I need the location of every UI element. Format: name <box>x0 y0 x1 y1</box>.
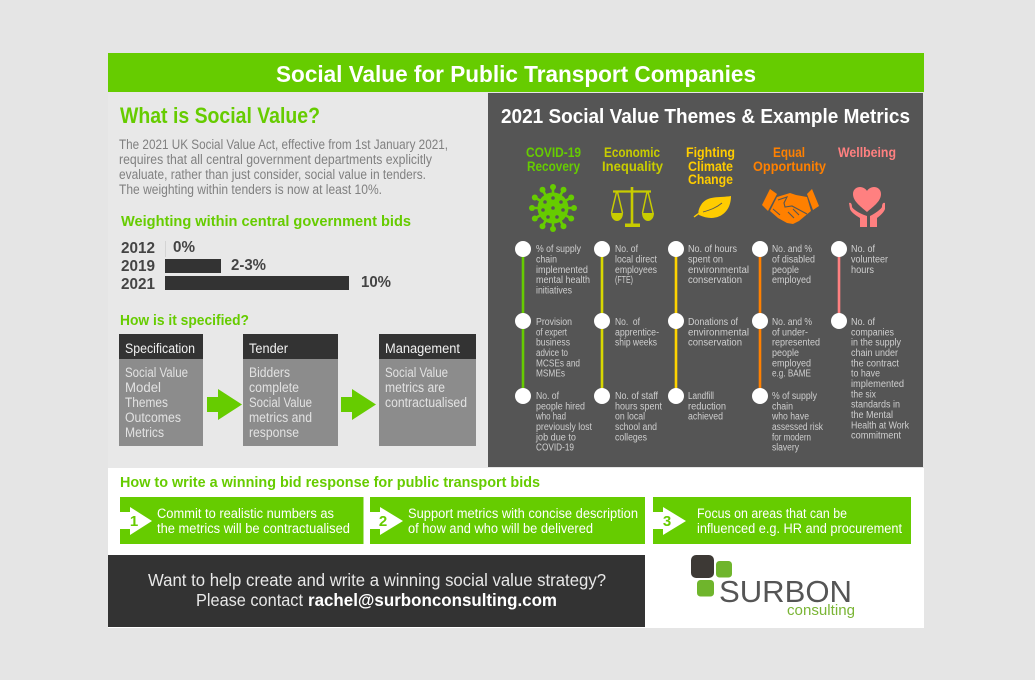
timeline: economic inequality <box>594 241 610 404</box>
metric: economic inequality 3 <box>615 391 662 443</box>
bar 2021: 10% <box>361 274 391 291</box>
theme label: equal opportunity <box>753 145 826 174</box>
icon: handshake <box>762 189 819 224</box>
card: tender: Tender <box>249 341 288 356</box>
metric: equal opportunity 3: who have <box>771 412 809 423</box>
title banner: Social Value for Public Transport Companies <box>276 61 756 87</box>
column: equal opportunity <box>752 145 826 454</box>
metric: equal opportunity 2: of under- <box>772 327 808 338</box>
logo: surbon consulting: consulting <box>787 602 855 619</box>
theme label: equal opportunity: Equal <box>773 145 805 160</box>
step 3 <box>653 497 911 544</box>
step 3: 3 <box>663 513 671 530</box>
metric: economic inequality 1 <box>615 244 657 286</box>
metric: equal opportunity 1 <box>772 244 815 286</box>
metric: equal opportunity 2: represented <box>772 338 820 349</box>
metric: covid-19 recovery 3 <box>535 391 592 454</box>
metric: fighting climate change 1: conservation <box>688 275 742 286</box>
metric: economic inequality 2 <box>615 317 659 349</box>
metric: fighting climate change 1: spent on <box>688 254 723 266</box>
heading: winning bid response: How to write a winning bid response for public transport bids <box>120 475 540 491</box>
metric: covid-19 recovery 3: No. of <box>536 391 559 402</box>
call to action banner <box>108 555 645 627</box>
metric: fighting climate change 1: No. of hours <box>688 244 737 255</box>
card: tender: response <box>249 425 299 440</box>
icon: balance scales <box>611 187 654 227</box>
arrow: tender to management <box>341 389 376 420</box>
column: covid-19 recovery <box>515 145 592 454</box>
card: specification: Social Value <box>125 365 188 380</box>
metric: wellbeing 2: in the supply <box>851 338 901 349</box>
theme label: covid-19 recovery <box>526 145 581 174</box>
metric: equal opportunity 2: employed <box>772 358 811 369</box>
theme label: fighting climate change: Change <box>688 172 733 187</box>
metric: equal opportunity 3: % of supply <box>772 391 817 402</box>
metric: equal opportunity 1: employed <box>772 275 811 286</box>
timeline: wellbeing <box>831 241 847 329</box>
metric: covid-19 recovery 1: initiatives <box>536 285 572 296</box>
metric: covid-19 recovery 3: previously lost <box>536 422 592 433</box>
column: wellbeing <box>831 145 910 442</box>
metric: equal opportunity 2 <box>772 317 820 380</box>
metric: wellbeing 2: chain under <box>851 348 899 359</box>
bar 2012: 2012 <box>121 240 155 257</box>
step 2: Support metrics with concise description <box>408 506 638 521</box>
metric: equal opportunity 3: chain <box>772 401 793 412</box>
logo: surbon consulting: SURBON <box>719 574 852 609</box>
card: specification: Model <box>125 380 161 395</box>
metric: covid-19 recovery 1: chain <box>536 254 557 266</box>
timeline: equal opportunity <box>752 241 768 404</box>
step 3: influenced e.g. HR and procurement <box>697 521 902 536</box>
metric: fighting climate change 3: Landfill <box>688 391 714 402</box>
metric: covid-19 recovery 1: % of supply <box>536 244 581 255</box>
theme label: wellbeing: Wellbeing <box>838 145 896 160</box>
logo: surbon consulting <box>691 555 855 619</box>
call to action banner: rachel@surbonconsulting.com <box>308 590 557 610</box>
step 1 <box>120 497 364 544</box>
metric: fighting climate change 1: environmental <box>688 265 749 276</box>
text block: act description: The 2021 UK Social Value Act, effective from 1st January 2021, <box>119 137 448 152</box>
bar 2019: 2019 <box>121 258 155 275</box>
metric: wellbeing 2: implemented <box>851 379 904 390</box>
metric: economic inequality 3: school and <box>615 422 657 433</box>
metric: wellbeing 1: No. of <box>851 244 875 255</box>
metric: wellbeing 2: the Mental <box>851 410 893 421</box>
metric: wellbeing 2: to have <box>851 369 880 380</box>
theme label: fighting climate change <box>686 145 735 187</box>
bar 2021 <box>121 274 391 293</box>
metric: economic inequality 2: ship weeks <box>615 338 657 349</box>
step 1: 1 <box>130 513 138 530</box>
chart heading: Weighting within central government bids <box>121 214 411 230</box>
metric: economic inequality 1: No. of <box>615 244 638 255</box>
card: management: Social Value <box>385 365 448 380</box>
step 1: Commit to realistic numbers as <box>157 506 334 521</box>
metric: covid-19 recovery 2: advice to <box>536 348 568 359</box>
call to action banner: Want to help create and write a winning social value strategy? <box>148 570 606 590</box>
metric: fighting climate change 3: achieved <box>688 412 723 423</box>
card: tender <box>243 334 338 446</box>
bar 2019 <box>121 257 266 275</box>
theme label: economic inequality <box>602 145 663 174</box>
theme label: economic inequality: Inequality <box>602 159 663 174</box>
theme label: covid-19 recovery: COVID-19 <box>526 145 581 160</box>
panel: 2021 social value themes and example metrics <box>488 93 923 467</box>
metric: economic inequality 1: employees <box>615 265 657 276</box>
section: how is it specified <box>119 313 476 446</box>
metric: covid-19 recovery 2: business <box>536 338 570 349</box>
metric: fighting climate change 2: conservation <box>688 338 742 349</box>
metric: covid-19 recovery 3: who had <box>535 412 566 423</box>
text block: act description <box>119 137 448 197</box>
metric: economic inequality 3: No. of staff <box>615 391 658 402</box>
heading: how is it specified: How is it specified? <box>120 313 249 329</box>
metric: wellbeing 2: No. of <box>851 317 875 328</box>
card: management: contractualised <box>385 395 467 410</box>
step 3: Focus on areas that can be <box>697 506 847 521</box>
metric: covid-19 recovery 2 <box>536 317 580 380</box>
card: tender: metrics and <box>249 410 312 425</box>
card: specification <box>119 334 203 446</box>
metric: covid-19 recovery 1 <box>536 244 590 296</box>
text block: act description: requires that all central government departments explicitly <box>119 152 432 167</box>
metric: wellbeing 2: commitment <box>851 431 901 442</box>
metric: covid-19 recovery 3: people hired <box>536 401 585 412</box>
timeline: fighting climate change <box>668 241 684 404</box>
theme label: fighting climate change: Climate <box>688 159 733 174</box>
metric: economic inequality 1: local direct <box>615 254 657 266</box>
metric: fighting climate change 2: environmental <box>688 327 749 338</box>
step 2: of how and who will be delivered <box>408 521 593 536</box>
icon: heart in hands <box>849 187 885 227</box>
bar 2012: 0% <box>173 239 195 256</box>
metric: equal opportunity 1: No. and % <box>772 244 812 255</box>
metric: equal opportunity 3 <box>771 391 824 454</box>
panel heading: 2021 Social Value Themes & Example Metrics <box>501 106 910 128</box>
left panel background <box>108 92 488 468</box>
metric: covid-19 recovery 3: job due to <box>535 432 576 443</box>
metric: covid-19 recovery 2: MSMEs <box>536 369 565 380</box>
bottom white panel background <box>108 468 924 628</box>
metric: wellbeing 2: standards in <box>851 400 900 411</box>
metric: wellbeing 1: hours <box>851 265 874 276</box>
card: specification: Metrics <box>125 425 164 440</box>
card: management <box>379 334 476 446</box>
title banner <box>108 53 924 92</box>
step 2 <box>370 497 645 544</box>
metric: economic inequality 3: colleges <box>615 432 647 443</box>
metric: covid-19 recovery 2: MCSEs and <box>536 358 580 369</box>
metric: covid-19 recovery 3: COVID-19 <box>536 443 574 454</box>
metric: wellbeing 2: the contract <box>851 358 899 369</box>
metric: equal opportunity 3: slavery <box>772 443 799 454</box>
metric: equal opportunity 2: people <box>772 348 799 359</box>
metric: fighting climate change 2 <box>688 317 749 349</box>
card: management: metrics are <box>385 380 445 395</box>
theme label: covid-19 recovery: Recovery <box>527 159 580 174</box>
arrow: specification to tender <box>207 389 242 420</box>
metric: economic inequality 2: No. of <box>615 317 640 328</box>
card: tender: Social Value <box>249 395 312 410</box>
card: specification: Specification <box>125 341 195 356</box>
heading: what is social value: What is Social Value? <box>120 103 320 128</box>
metric: wellbeing 1 <box>851 244 889 276</box>
metric: covid-19 recovery 1: mental health <box>536 275 590 286</box>
metric: fighting climate change 2: Donations of <box>688 317 738 328</box>
metric: equal opportunity 3: assessed risk <box>772 422 824 433</box>
panel: what is social value <box>119 103 448 197</box>
card: specification: Outcomes <box>125 410 181 425</box>
metric: covid-19 recovery 2: Provision <box>536 317 572 328</box>
metric: wellbeing 2: the six <box>851 389 876 400</box>
bar 2012 <box>121 239 195 257</box>
metric: fighting climate change 3 <box>688 391 726 423</box>
metric: economic inequality 2: apprentice- <box>615 327 659 338</box>
text block: act description: The weighting within tenders is now at least 10%. <box>119 182 382 197</box>
metric: covid-19 recovery 2: of expert <box>536 327 567 338</box>
bar 2021: 2021 <box>121 276 155 293</box>
metric: wellbeing 2: companies <box>851 327 894 338</box>
timeline: covid-19 recovery <box>515 241 531 404</box>
step 2: 2 <box>379 513 387 530</box>
column: fighting climate change <box>668 145 749 423</box>
card: tender: Bidders <box>249 365 290 380</box>
metric: economic inequality 3: on local <box>615 412 645 423</box>
metric: wellbeing 2: Health at Work <box>851 420 910 431</box>
metric: equal opportunity 1: people <box>772 265 799 276</box>
column: economic inequality <box>594 145 663 443</box>
step 1: the metrics will be contractualised <box>157 521 350 536</box>
bar chart: weighting within central government bids <box>121 214 411 293</box>
icon: virus <box>529 184 577 232</box>
metric: equal opportunity 2: No. and % <box>772 317 812 328</box>
metric: wellbeing 1: volunteer <box>851 254 889 266</box>
metric: equal opportunity 2: e.g. BAME <box>772 369 811 380</box>
card: specification: Themes <box>125 395 168 410</box>
theme label: fighting climate change: Fighting <box>686 145 735 160</box>
bar 2019: 2-3% <box>231 257 266 274</box>
metric: equal opportunity 1: of disabled <box>772 254 815 266</box>
card: management: Management <box>385 341 460 356</box>
metric: fighting climate change 1 <box>688 244 749 286</box>
section: how to write a winning bid response <box>120 475 911 544</box>
card: tender: complete <box>249 380 299 395</box>
metric: covid-19 recovery 1: implemented <box>536 265 588 276</box>
text block: act description: evaluate, rather than just consider, social value in tenders. <box>119 167 426 182</box>
metric: wellbeing 2 <box>851 317 910 442</box>
metric: fighting climate change 3: reduction <box>688 401 726 412</box>
icon: leaf <box>694 196 731 218</box>
metric: equal opportunity 3: for modern <box>772 432 811 443</box>
theme label: equal opportunity: Opportunity <box>753 159 826 174</box>
theme label: economic inequality: Economic <box>604 145 660 160</box>
call to action banner: Please contact <box>196 590 303 610</box>
metric: economic inequality 3: hours spent <box>615 401 662 412</box>
metric: economic inequality 1: (FTE) <box>615 275 633 286</box>
